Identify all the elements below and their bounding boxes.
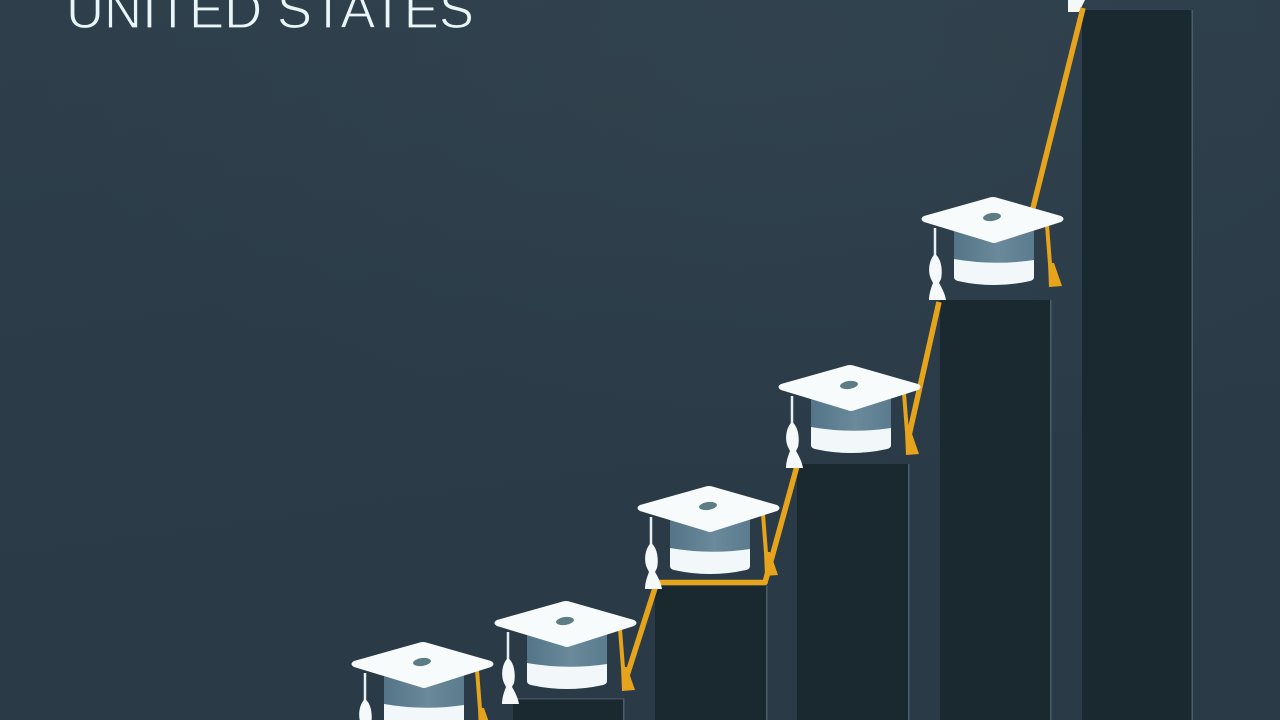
cap 2 [494, 601, 636, 704]
bar 1 [513, 698, 624, 720]
bar 3 [797, 464, 910, 720]
bar chart [513, 10, 1193, 720]
growth arrow line [625, 8, 1083, 682]
cap 1 [352, 642, 494, 720]
cap 3 [638, 486, 780, 589]
bar 4 [940, 300, 1052, 720]
bar 5 [1082, 10, 1193, 720]
arrow tip [1068, 0, 1085, 12]
cap 4 [778, 365, 920, 468]
cap 5 [922, 197, 1064, 300]
bar 2 [655, 586, 768, 720]
